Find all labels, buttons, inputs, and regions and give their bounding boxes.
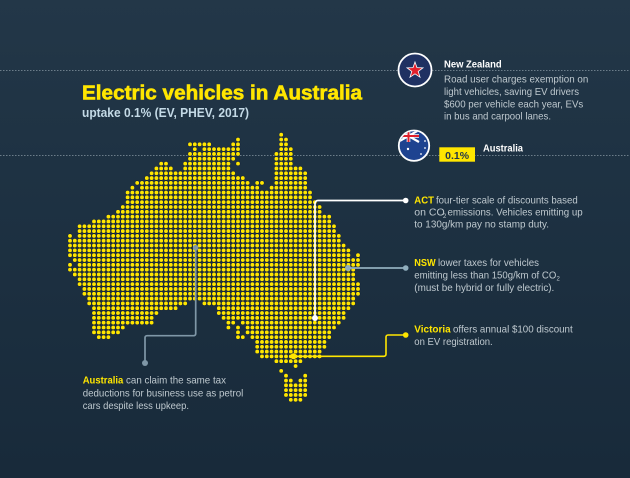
- text: ACT: [414, 194, 583, 231]
- text: Australia tax: deductions for business use as petrol: [83, 388, 243, 400]
- connector: Australia: [142, 245, 198, 366]
- subtitle: uptake 0.1% (EV, PHEV, 2017): [82, 106, 249, 120]
- text: ACT: 2: [443, 214, 447, 220]
- text: NSW: emitting less than 150g/km of CO: [414, 269, 556, 281]
- text: New Zealand policy: light vehicles, saving EV drivers: [444, 86, 579, 98]
- connector: Victoria: [290, 332, 409, 359]
- text: Australia tax: [83, 374, 243, 412]
- text: Victoria: Victoria: [414, 323, 451, 335]
- text: NSW: (must be hybrid or fully electric).: [414, 282, 554, 294]
- text: Victoria: on EV registration.: [414, 336, 493, 348]
- text: NSW: [414, 257, 560, 294]
- panel: New Zealand: [398, 54, 588, 122]
- text: Australia tax: can claim the same tax: [126, 374, 227, 386]
- map: dotted Australia: [70, 135, 358, 400]
- text: ACT: to 130g/km pay no stamp duty.: [414, 219, 549, 231]
- text: Victoria: [414, 323, 573, 348]
- icon: Australian flag badge: [398, 130, 429, 161]
- text: ACT: on CO: [414, 207, 445, 219]
- text: NSW: 2: [556, 276, 560, 282]
- text: NSW: NSW: [414, 257, 436, 269]
- text: New Zealand policy: [444, 73, 588, 122]
- text: ACT: four-tier scale of discounts based: [436, 194, 578, 206]
- text: Australia tax: cars despite less upkeep.: [83, 400, 189, 412]
- text: Victoria: offers annual $100 discount: [453, 323, 573, 335]
- heading: New Zealand: New Zealand: [444, 58, 502, 70]
- text: New Zealand policy: $600 per vehicle each year, EVs: [444, 98, 583, 110]
- text: Australia tax: Australia: [83, 374, 123, 386]
- text: New Zealand policy: in bus and carpool lanes.: [444, 110, 551, 122]
- connector: NSW: [345, 265, 409, 271]
- icon: New Zealand flag badge: [398, 54, 432, 86]
- panel: Australia uptake: [398, 130, 523, 162]
- text: ACT: ACT: [414, 194, 435, 206]
- connector: ACT: [312, 198, 409, 321]
- text: ACT: emissions. Vehicles emitting up: [448, 207, 583, 219]
- text: NSW: lower taxes for vehicles: [438, 257, 539, 269]
- text: New Zealand policy: Road user charges exemption on: [444, 73, 588, 85]
- title: Electric vehicles in Australia: [82, 81, 363, 104]
- label: Australia: Australia: [483, 143, 523, 155]
- badge: 0.1%: 0.1%: [445, 150, 470, 162]
